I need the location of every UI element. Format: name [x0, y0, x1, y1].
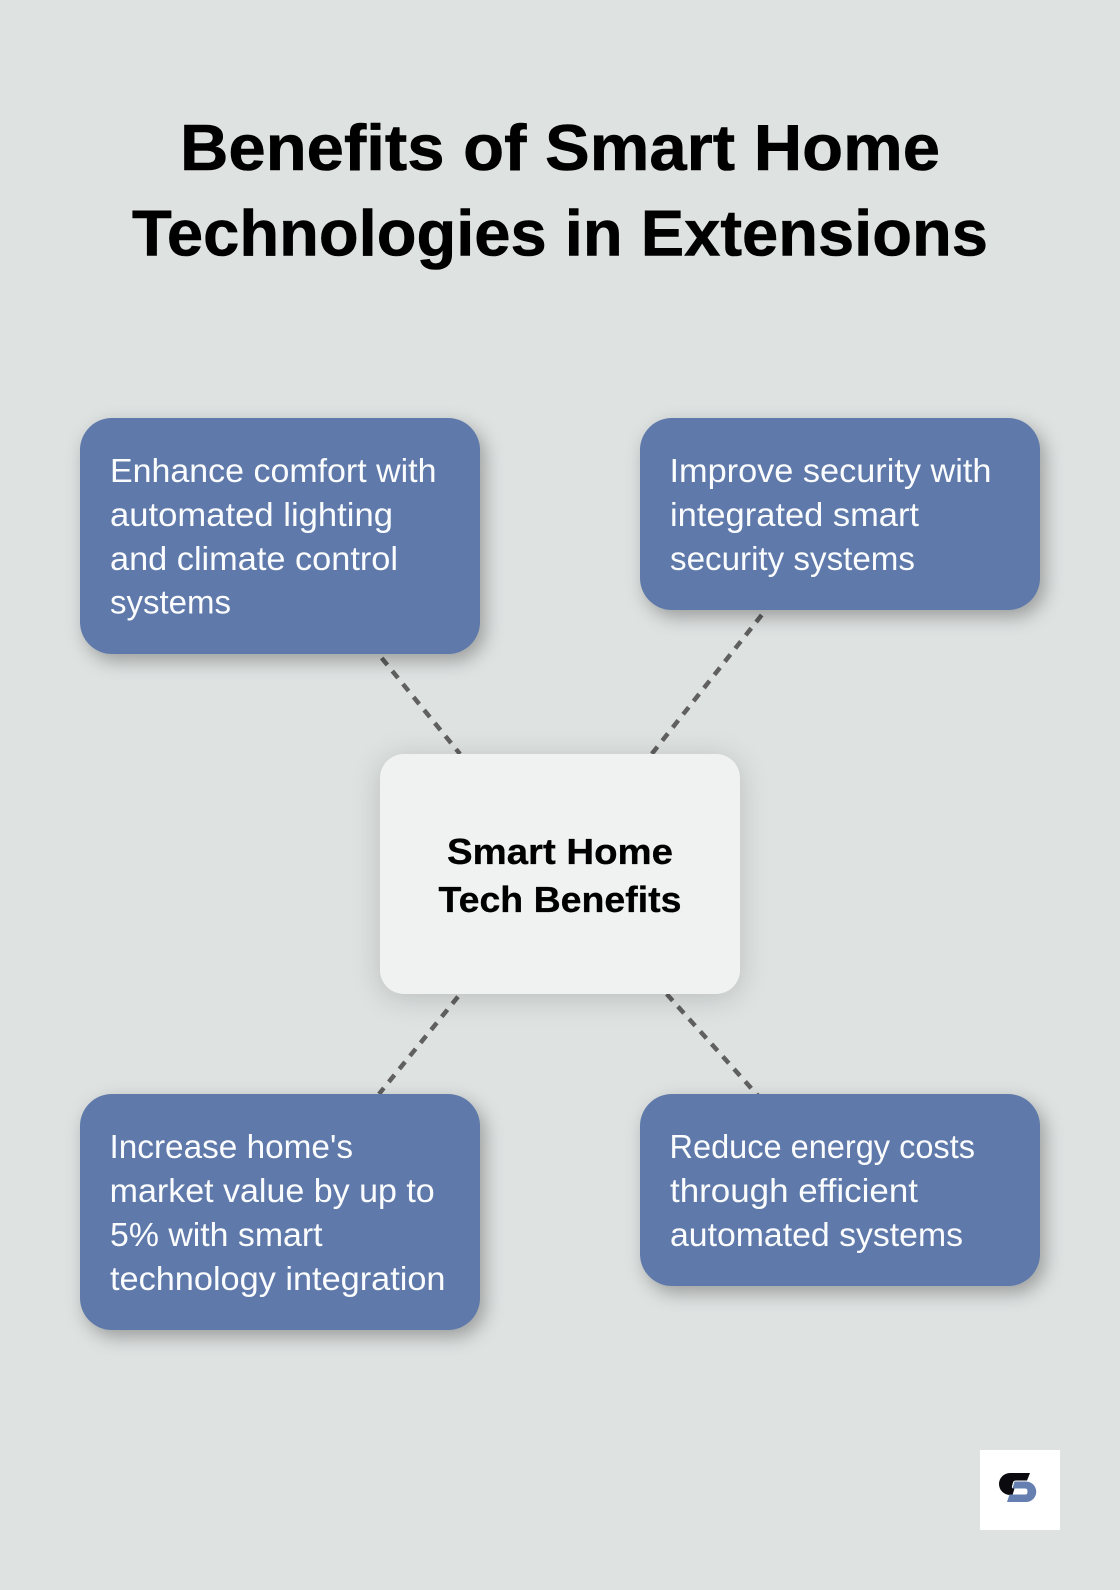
panel: comfort benefit — [80, 418, 480, 654]
panel: comfort benefit: Enhance comfort with — [110, 452, 436, 489]
panel: security benefit — [640, 418, 1040, 610]
panel: market value benefit: 5% with smart — [110, 1216, 322, 1253]
panel: energy costs benefit: through efficient — [670, 1172, 918, 1209]
panel: market value benefit: technology integration — [110, 1260, 446, 1297]
panel: energy costs benefit — [640, 1094, 1040, 1286]
panel: security benefit: security systems — [670, 540, 915, 577]
panel: energy costs benefit: Reduce energy costs — [670, 1128, 975, 1165]
panel: comfort benefit: automated lighting — [110, 496, 393, 533]
connector: comfort to center — [382, 658, 460, 754]
connector: security to center — [652, 615, 762, 754]
panel: security benefit: integrated smart — [670, 496, 919, 533]
title: Technologies in Extensions — [132, 197, 988, 270]
title: Benefits of Smart Home — [180, 111, 940, 184]
panel: market value benefit: Increase home's — [110, 1128, 353, 1165]
panel: comfort benefit: and climate control — [110, 540, 398, 577]
panel: market value benefit: market value by up to — [110, 1172, 435, 1209]
title — [132, 111, 988, 270]
panel: center hub: Smart Home — [447, 831, 673, 872]
icon: logo — [980, 1450, 1060, 1530]
panel: market value benefit — [80, 1094, 480, 1330]
panel: security benefit: Improve security with — [670, 452, 992, 489]
panel: center hub — [380, 754, 740, 994]
panel: energy costs benefit: automated systems — [670, 1216, 963, 1253]
panel: comfort benefit: systems — [110, 584, 231, 620]
connector: energy costs to center — [667, 994, 760, 1098]
connector: market value to center — [379, 997, 458, 1094]
panel: center hub: Tech Benefits — [438, 879, 682, 920]
